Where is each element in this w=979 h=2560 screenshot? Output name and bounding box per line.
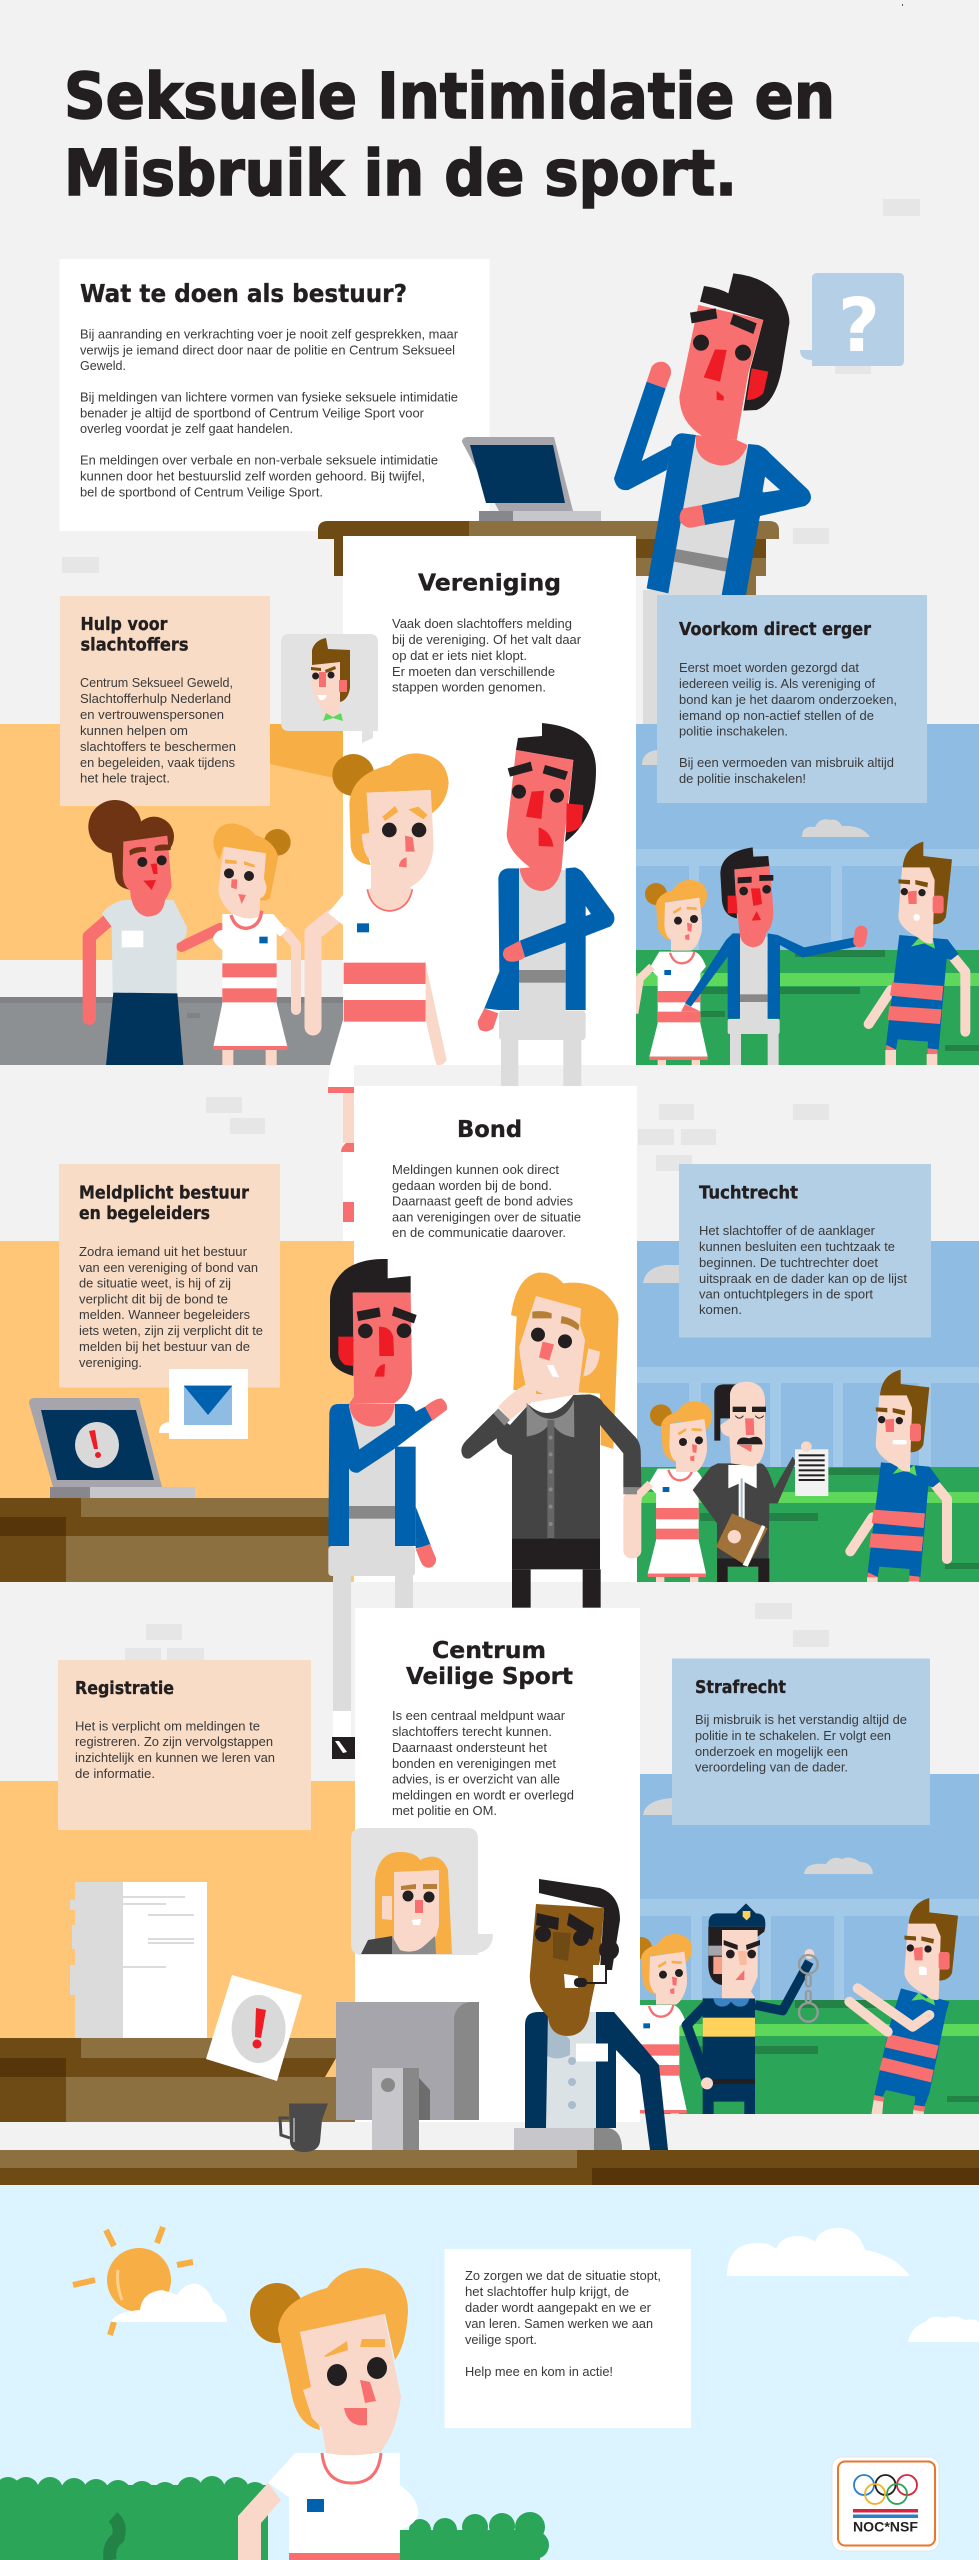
text block: strafrecht: veroordeling van de dader. (695, 1760, 848, 1774)
text block: bestuur: kunnen door het bestuurslid zelf worden gehoord. Bij twijfel, (80, 470, 425, 484)
heading: strafrecht: Strafrecht (695, 1677, 786, 1698)
text block: meldplicht: Zodra iemand uit het bestuur (79, 1245, 248, 1259)
heading: centrum veilige sport (406, 1636, 573, 1690)
text block: registratie: registreren. Zo zijn vervolgstappen (75, 1735, 273, 1749)
panel: centrum veilige sport (355, 1608, 640, 2122)
text block: bond: Daarnaast geeft de bond advies (392, 1194, 573, 1208)
icon: small cloud (908, 2316, 979, 2342)
text block: bond: aan verenigingen over de situatie (392, 1210, 581, 1224)
title: Seksuele Intimidatie en (64, 60, 835, 133)
icon: chat bubble with boy portrait (281, 634, 378, 743)
logo: NOC*NSF: NOC*NSF (853, 2520, 918, 2534)
illustration: blonde woman in bond panel (461, 1273, 641, 1608)
text block: tuchtrecht: uitspraak en de dader kan op de lijst (699, 1272, 907, 1286)
panel: wat te doen als bestuur (60, 259, 490, 531)
girl with bun (213, 823, 296, 1065)
text block: meldplicht: melden. Wanneer begeleiders (79, 1308, 250, 1322)
title (64, 60, 835, 210)
text block: bestuur: overleg voordat je zelf gaat handelen. (80, 422, 293, 436)
illustration: laptop with alert (29, 1398, 195, 1498)
icon: sun with rays (73, 2227, 193, 2335)
scene: sports field middle (637, 1241, 979, 1582)
icon: question speech bubble: ? (838, 283, 880, 369)
text block: hulp: kunnen helpen om (80, 724, 188, 738)
illustration: girl, judge and boy on field (633, 1370, 947, 1595)
scene: orange room left (0, 724, 343, 1065)
text block: closing: van leren. Samen werken we aan (465, 2317, 653, 2331)
boy with raised hands (849, 1898, 958, 2117)
text block: voorkom: de politie inschakelen! (679, 772, 806, 786)
illustration: stack of papers (70, 1882, 207, 2038)
scene: orange room middle with desk (0, 1241, 354, 1582)
text block: hulp: en vertrouwenspersonen (80, 708, 224, 722)
text block: hulp (80, 676, 236, 786)
text block: voorkom: Eerst moet worden gezorgd dat (679, 661, 859, 675)
text block: vereniging: Vaak doen slachtoffers melding (392, 617, 572, 631)
text block: bestuur: En meldingen over verbale en non-verbale seksuele intimidatie (80, 454, 438, 468)
text block: closing: Zo zorgen we dat de situatie stopt, (465, 2269, 661, 2283)
panel: meldplicht (59, 1164, 280, 1388)
text block: meldplicht: de situatie weet, is hij of zij (79, 1276, 231, 1290)
text block: hulp: slachtoffers te beschermen (80, 740, 236, 754)
heading: wat te doen: Wat te doen als bestuur? (80, 279, 407, 308)
text block: voorkom: iemand op non-actief stellen of de (679, 709, 874, 723)
heading: registratie: Registratie (75, 1678, 174, 1699)
text block: registratie (75, 1720, 275, 1781)
illustration: smiling blonde girl (238, 2268, 418, 2560)
scene: sky background (0, 2185, 979, 2560)
icon: envelope speech bubble (159, 1369, 248, 1439)
text block: bond (392, 1163, 581, 1240)
text block: centrum: meldingen en wordt er overlegd (392, 1788, 574, 1802)
text block: tuchtrecht: beginnen. De tuchtrechter doet (699, 1256, 878, 1270)
text block: voorkom: politie inschakelen. (679, 724, 788, 738)
text block: centrum: advies, is er overzicht van alle (392, 1772, 560, 1786)
text block: hulp: en begeleiden, vaak tijdens (80, 756, 235, 770)
icon: coffee mug (280, 2104, 328, 2152)
illustration: man in vereniging panel (478, 723, 614, 1087)
text block: voorkom: bond kan je het daarom onderzoeken, (679, 693, 897, 707)
text block: meldplicht: melden bij het bestuur van de (79, 1340, 250, 1354)
panel: bond (343, 1086, 637, 1582)
heading: centrum veilige sport: Centrum (432, 1636, 546, 1664)
text block: meldplicht: verplicht dit bij de bond te (79, 1292, 228, 1306)
heading: hulp voor slachtoffers: slachtoffers (80, 634, 188, 655)
text block: tuchtrecht (699, 1224, 907, 1317)
heading: hulp voor slachtoffers (80, 614, 188, 655)
man stopping (681, 847, 868, 1065)
woman with brown hair (88, 800, 220, 1065)
icon: large cloud (727, 2228, 910, 2276)
text block: strafrecht: politie in te schakelen. Er volgt een (695, 1729, 891, 1743)
illustration: bushes (0, 2476, 549, 2560)
text block: bestuur: benader je altijd de sportbond of Centrum Veilige Sport voor (80, 406, 425, 420)
text block: closing: het slachtoffer hulp krijgt, de (465, 2285, 629, 2299)
illustration: thinking man at desk (614, 273, 811, 725)
panel: strafrecht (672, 1658, 930, 1825)
text block: closing: dader wordt aangepakt en we er (465, 2301, 652, 2315)
illustration: desk (318, 521, 779, 596)
panel: voorkom direct erger (657, 595, 927, 803)
illustration: call centre agent (514, 1879, 668, 2150)
text block: registratie: de informatie. (75, 1767, 155, 1781)
text block: centrum: met politie en OM. (392, 1804, 497, 1818)
text block: voorkom: iedereen veilig is. Als vereniging of (679, 677, 875, 691)
police officer (687, 1903, 814, 2115)
text block: vereniging: bij de vereniging. Of het valt daar (392, 633, 582, 647)
scene: orange room bottom with desk (0, 1781, 355, 2122)
text block: strafrecht: onderzoek en mogelijk een (695, 1745, 848, 1759)
logo: NOC*NSF (832, 2457, 939, 2551)
icon: chat bubble with woman portrait (351, 1828, 493, 1955)
judge (693, 1382, 828, 1582)
text block: vereniging (392, 617, 582, 694)
text block: registratie: inzichtelijk en kunnen we leren van (75, 1751, 275, 1765)
text block: vereniging: Er moeten dan verschillende (392, 665, 555, 679)
scene: sports field right (636, 724, 979, 1065)
icon: cloud near sun (111, 2284, 227, 2322)
text block: closing (445, 2249, 691, 2428)
text block: vereniging: stappen worden genomen. (392, 680, 546, 694)
title: Misbruik in de sport. (64, 137, 737, 210)
text block: tuchtrecht: komen. (699, 1303, 742, 1317)
text block: meldplicht: van een vereniging of bond van (79, 1261, 258, 1275)
text block: bestuur: verwijs je iemand direct door naar de politie en Centrum Seksueel (80, 343, 455, 357)
text block: bestuur: Bij aanranding en verkrachting voer je nooit zelf gesprekken, maar (80, 328, 459, 342)
text block: meldplicht: vereniging. (79, 1356, 142, 1370)
panel: vereniging (343, 536, 636, 1065)
text block: hulp: het hele traject. (80, 772, 170, 786)
text block: closing: Help mee en kom in actie! (465, 2365, 613, 2379)
text block: voorkom (679, 661, 897, 786)
text block: bond: gedaan worden bij de bond. (392, 1179, 552, 1193)
text block: hulp: Centrum Seksueel Geweld, (80, 676, 233, 690)
text block: bestuur: bel de sportbond of Centrum Veilige Sport. (80, 486, 323, 500)
icon: question speech bubble (800, 273, 904, 369)
text block: hulp: Slachtofferhulp Nederland (80, 692, 231, 706)
illustration: girl legs above bond panel (328, 1087, 354, 1222)
heading: hulp voor slachtoffers: Hulp voor (80, 614, 168, 635)
heading: vereniging: Vereniging (418, 569, 561, 597)
text block: strafrecht: Bij misbruik is het verstandig altijd de (695, 1713, 907, 1727)
text block: meldplicht: iets weten, zijn zij verplicht dit te (79, 1324, 263, 1338)
illustration: monitor (336, 2002, 479, 2150)
text block: closing: veilige sport. (465, 2333, 537, 2347)
text block: voorkom: Bij een vermoeden van misbruik altijd (679, 756, 894, 770)
text block: centrum (392, 1709, 574, 1818)
illustration: girl, man and boy on field (634, 842, 965, 1067)
heading: tuchtrecht: Tuchtrecht (699, 1183, 798, 1204)
heading: bond: Bond (457, 1115, 522, 1143)
text block: bestuur (80, 328, 459, 500)
text block: bestuur: Bij meldingen van lichtere vormen van fysieke seksuele intimidatie (80, 390, 458, 404)
illustration: man in bond panel (328, 1259, 447, 1759)
scene: sports field bottom (640, 1774, 979, 2114)
text block: tuchtrecht: kunnen besluiten een tuchtzaak te (699, 1240, 895, 1254)
floor and table (0, 2122, 979, 2185)
text block: bond: en de communicatie daarover. (392, 1226, 566, 1240)
text block: registratie: Het is verplicht om meldingen te (75, 1720, 260, 1734)
heading: voorkom: Voorkom direct erger (679, 619, 871, 640)
heading: centrum veilige sport: Veilige Sport (406, 1662, 573, 1690)
text block: centrum: bonden en verenigingen met (392, 1757, 556, 1771)
panel: registratie (58, 1660, 311, 1830)
illustration: woman and girl (88, 800, 296, 1065)
text block: bestuur: Geweld. (80, 359, 126, 373)
illustration: girl, police officer and boy on field (640, 1898, 958, 2114)
text block: strafrecht (695, 1713, 907, 1774)
heading: meldplicht: Meldplicht bestuur (79, 1183, 249, 1204)
illustration: large blonde girl (313, 753, 449, 1088)
text block: bond: Meldingen kunnen ook direct (392, 1163, 559, 1177)
text block: centrum: Daarnaast ondersteunt het (392, 1741, 547, 1755)
panel: hulp voor slachtoffers (60, 596, 270, 806)
text block: tuchtrecht: van ontuchtplegers in de sport (699, 1288, 873, 1302)
icon: handcuffs (799, 1955, 818, 2022)
heading: meldplicht: en begeleiders (79, 1203, 210, 1224)
heading: meldplicht (79, 1183, 249, 1224)
illustration: laptop on desk (462, 437, 601, 521)
text block: centrum: Is een centraal meldpunt waar (392, 1709, 566, 1723)
text block: tuchtrecht: Het slachtoffer of de aanklager (699, 1224, 876, 1238)
text block: centrum: slachtoffers terecht kunnen. (392, 1725, 552, 1739)
panel: tuchtrecht (679, 1164, 931, 1338)
text block: vereniging: op dat er iets niet klopt. (392, 649, 527, 663)
icon: alert paper (206, 1975, 302, 2081)
text block: meldplicht (79, 1245, 263, 1370)
